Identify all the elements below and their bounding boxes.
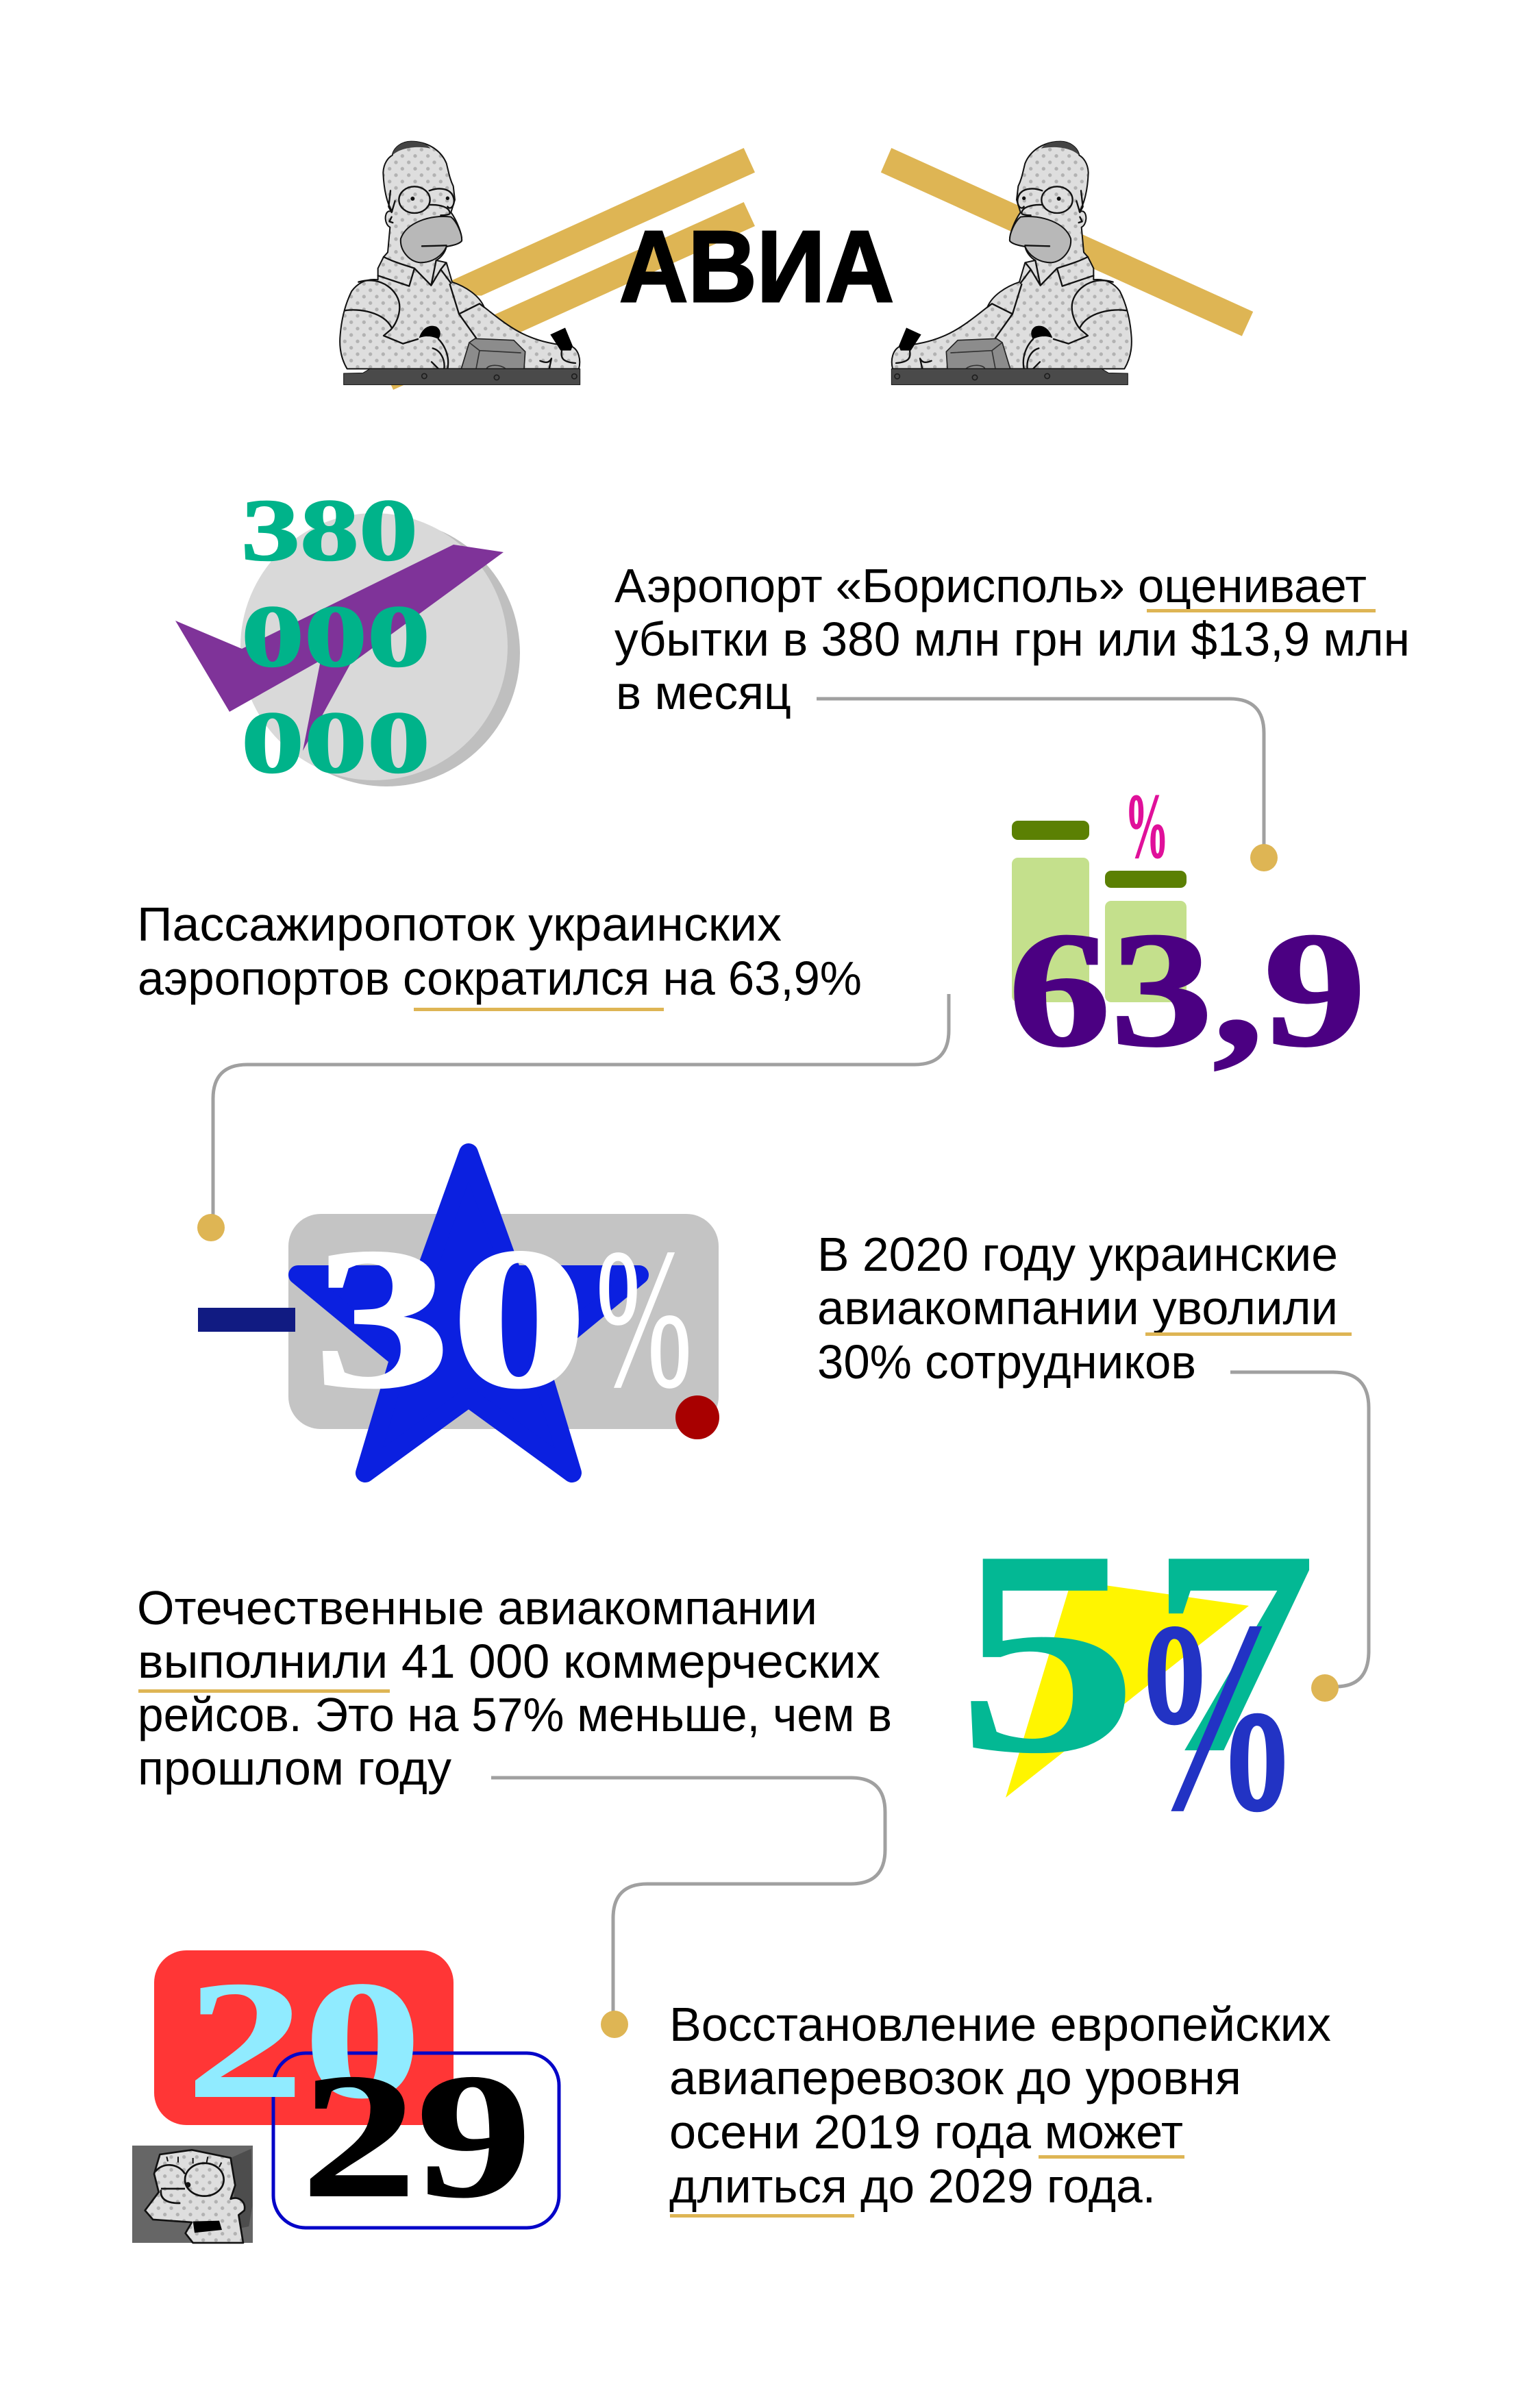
connector 4 [491, 1778, 885, 2038]
number 7: 7 [1150, 1490, 1317, 1814]
text block: staff cuts: авиакомпании уволили [817, 1281, 1338, 1334]
panel: 57% graphic [956, 1490, 1317, 1868]
text block: flights [137, 1581, 892, 1795]
percent sign: % [1130, 1565, 1300, 1868]
figure: right cartoon man [891, 142, 1132, 385]
connector 2 [197, 994, 949, 1241]
number 380 000 000: 000 [241, 693, 430, 791]
number 30: 30 [314, 1206, 588, 1430]
red card [154, 1950, 454, 2125]
text block: flights: Отечественные авиакомпании [137, 1581, 817, 1635]
connector 1 [817, 699, 1278, 871]
percent sign: % [596, 1208, 692, 1428]
bar 2 [1105, 901, 1187, 1002]
minus bar [198, 1308, 295, 1332]
text block: Borispol losses: в месяц [616, 666, 791, 719]
star [298, 1153, 639, 1473]
text block: passenger flow: Пассажиропоток украинских [137, 897, 782, 951]
number 20: 20 [186, 1947, 421, 2133]
yellow triangle [1006, 1580, 1249, 1798]
bar 1 cap [1012, 821, 1089, 840]
bar 2 cap [1105, 871, 1187, 888]
figure: left cartoon man [340, 142, 580, 385]
disc shadow [253, 519, 520, 786]
number 63,9: 63,9 [1008, 898, 1366, 1080]
number 380 000 000 [241, 481, 430, 791]
panel: 63,9% graphic [1008, 775, 1366, 1080]
grey card [288, 1214, 719, 1429]
text block: flights: прошлом году [138, 1741, 451, 1795]
connector 3 [1230, 1372, 1369, 1702]
panel: 2029 graphic [132, 1947, 559, 2243]
red dot [675, 1395, 719, 1439]
panel: -30% graphic [198, 1153, 719, 1473]
stripe: right yellow [881, 148, 1253, 336]
disc [240, 513, 508, 780]
panel: 380 000 000 graphic [175, 481, 520, 791]
number 380 000 000: 000 [241, 587, 430, 685]
stripes: left yellow [382, 148, 755, 390]
header: title with figures [340, 142, 1253, 390]
text block: staff cuts: 30% сотрудников [817, 1335, 1196, 1389]
text block: staff cuts: В 2020 году украинские [817, 1228, 1338, 1281]
text block: recovery forecast: осени 2019 года может [669, 2105, 1183, 2159]
bar 1 [1012, 858, 1089, 1002]
text block: Borispol losses [614, 559, 1410, 719]
plane check mark [175, 545, 504, 751]
text block: recovery forecast [669, 1998, 1331, 2218]
number 29: 29 [301, 2037, 532, 2235]
number 5: 5 [956, 1490, 1139, 1814]
text block: Borispol losses: Аэропорт «Борисполь» оценивает [614, 559, 1367, 612]
text block: flights: выполнили 41 000 коммерческих [138, 1635, 880, 1688]
text block: Borispol losses: убытки в 380 млн грн или $13,9 млн [614, 612, 1410, 666]
text block: passenger flow: аэропортов сократился на 63,9% [138, 952, 862, 1005]
text block: recovery forecast: Восстановление европейских [669, 1998, 1331, 2051]
text block: staff cuts [817, 1228, 1352, 1389]
text block: recovery forecast: длиться до 2029 года. [669, 2159, 1156, 2213]
panel: 63,9% graphic: % [1125, 775, 1169, 878]
outlined card [273, 2053, 559, 2228]
number 380 000 000: 380 [241, 481, 418, 579]
text block: passenger flow [137, 897, 862, 1011]
title: АВИА [619, 210, 894, 323]
icon: cartoon face [132, 2146, 253, 2243]
text block: flights: рейсов. Это на 57% меньше, чем в [138, 1688, 892, 1741]
text block: recovery forecast: авиаперевозок до уровня [669, 2051, 1241, 2104]
